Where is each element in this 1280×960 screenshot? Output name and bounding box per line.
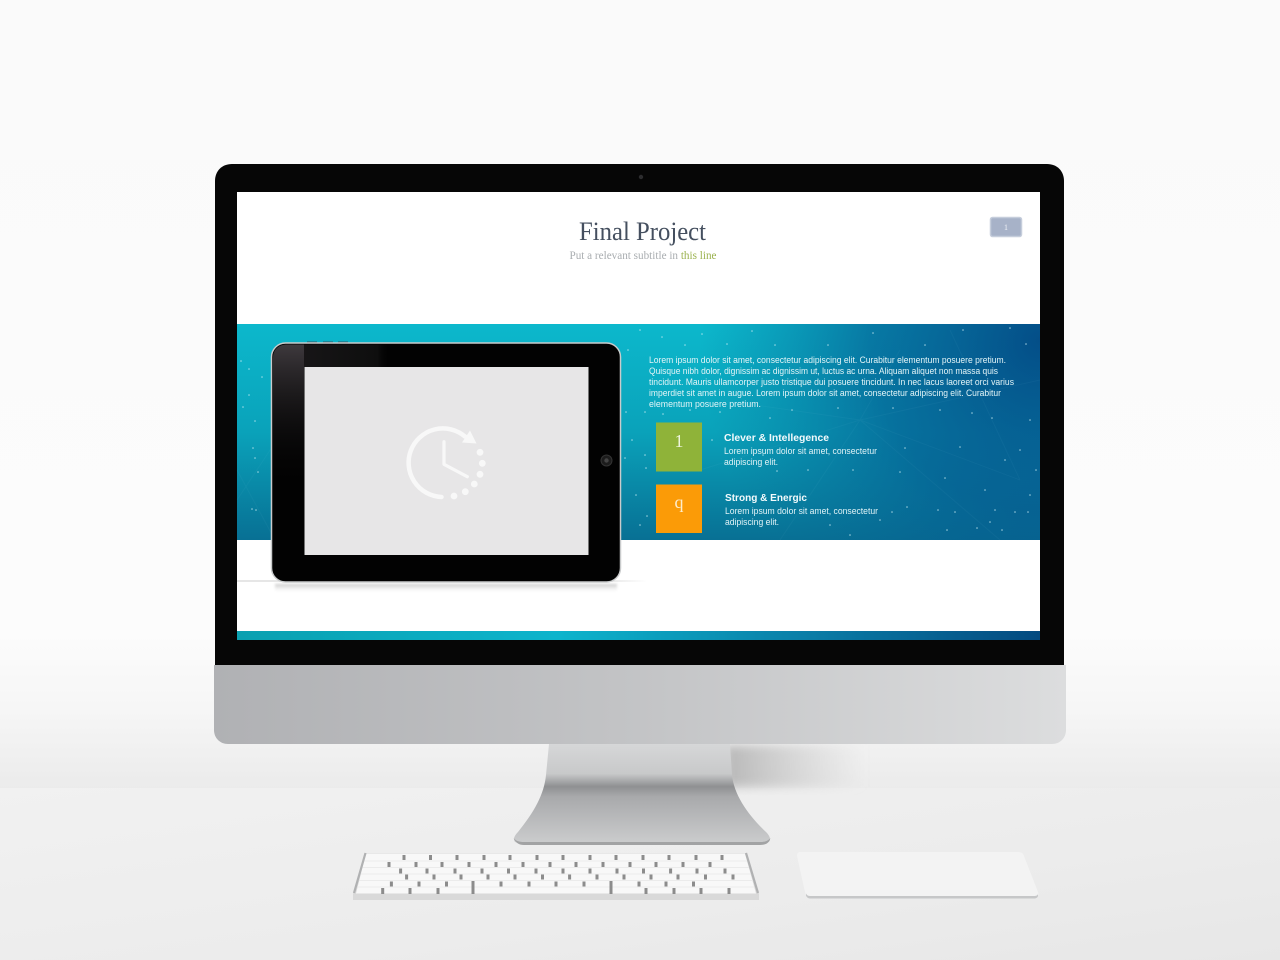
banner paragraph	[649, 355, 1014, 409]
feature 1 text: Lorem ipsum dolor sit amet, consectetur	[724, 446, 877, 456]
icon: clock with arrow	[409, 428, 482, 497]
page number badge	[990, 218, 1022, 236]
trackpad top	[797, 852, 1038, 896]
green number tile	[656, 422, 702, 472]
keyboard base	[353, 853, 759, 900]
stand shadow on wall	[725, 745, 865, 787]
tablet	[272, 342, 620, 582]
feature 1 text: Clever & Intellegence	[724, 432, 829, 444]
keyboard edges	[354, 853, 758, 893]
stand base edge	[514, 838, 770, 845]
banner paragraph: elementum posuere pretium.	[649, 399, 761, 409]
tablet top glare	[304, 344, 390, 367]
network lines	[237, 330, 1040, 540]
tablet shadow	[237, 580, 647, 593]
feature 2 text	[725, 492, 878, 527]
orange number tile	[656, 484, 702, 533]
top buttons	[307, 342, 348, 343]
tablet body	[272, 343, 620, 582]
page number badge: 1	[1004, 223, 1008, 232]
keyboard keys	[356, 854, 756, 894]
monitor chin	[214, 665, 1066, 744]
feature 2 text: Strong & Energic	[725, 492, 807, 504]
banner paragraph: imperdiet sit amet in augue. Lorem ipsum dolor sit amet, consectetur adipiscing elit. Curabitur	[649, 388, 1001, 398]
key row lines	[357, 861, 754, 887]
stars	[241, 328, 1036, 535]
webcam	[639, 175, 643, 179]
feature 1 text	[724, 432, 877, 467]
feature 2: q	[674, 492, 684, 512]
monitor bezel	[215, 164, 1064, 665]
feature 2 text: Lorem ipsum dolor sit amet, consectetur	[725, 506, 878, 516]
feature 1 text: adipiscing elit.	[724, 457, 778, 467]
trackpad edge	[806, 894, 1038, 898]
monitor stand	[514, 744, 770, 845]
banner paragraph: Quisque nibh dolor, dignissim ac dignissim ut, luctus ac urna. Aliquam aliquet non massa quis	[649, 366, 998, 376]
stand body	[514, 744, 770, 843]
home button	[601, 455, 612, 466]
desk surface	[0, 788, 1280, 960]
feature 1: 1	[674, 431, 684, 451]
banner paragraph: tincidunt. Mauris ullamcorper justo tristique dui posuere tincidunt. In nec lacus laoreet orci varius	[649, 377, 1014, 387]
feature 1	[656, 422, 877, 472]
key gaps	[383, 855, 733, 894]
slide screen	[237, 192, 1040, 640]
teal banner	[237, 324, 1040, 540]
slide background	[237, 192, 1040, 640]
tablet side glare	[273, 344, 304, 530]
feature 2 text: adipiscing elit.	[725, 517, 779, 527]
slide title: Final Project	[579, 217, 707, 246]
tablet screen	[304, 367, 588, 555]
keyboard	[353, 853, 759, 900]
trackpad	[797, 852, 1038, 898]
bottom teal strip	[237, 631, 1040, 640]
slide subtitle: Put a relevant subtitle in this line	[570, 250, 716, 262]
feature 2	[656, 484, 878, 533]
banner paragraph: Lorem ipsum dolor sit amet, consectetur adipiscing elit. Curabitur elementum posuere pretium.	[649, 355, 1006, 365]
monitor	[214, 164, 1066, 744]
